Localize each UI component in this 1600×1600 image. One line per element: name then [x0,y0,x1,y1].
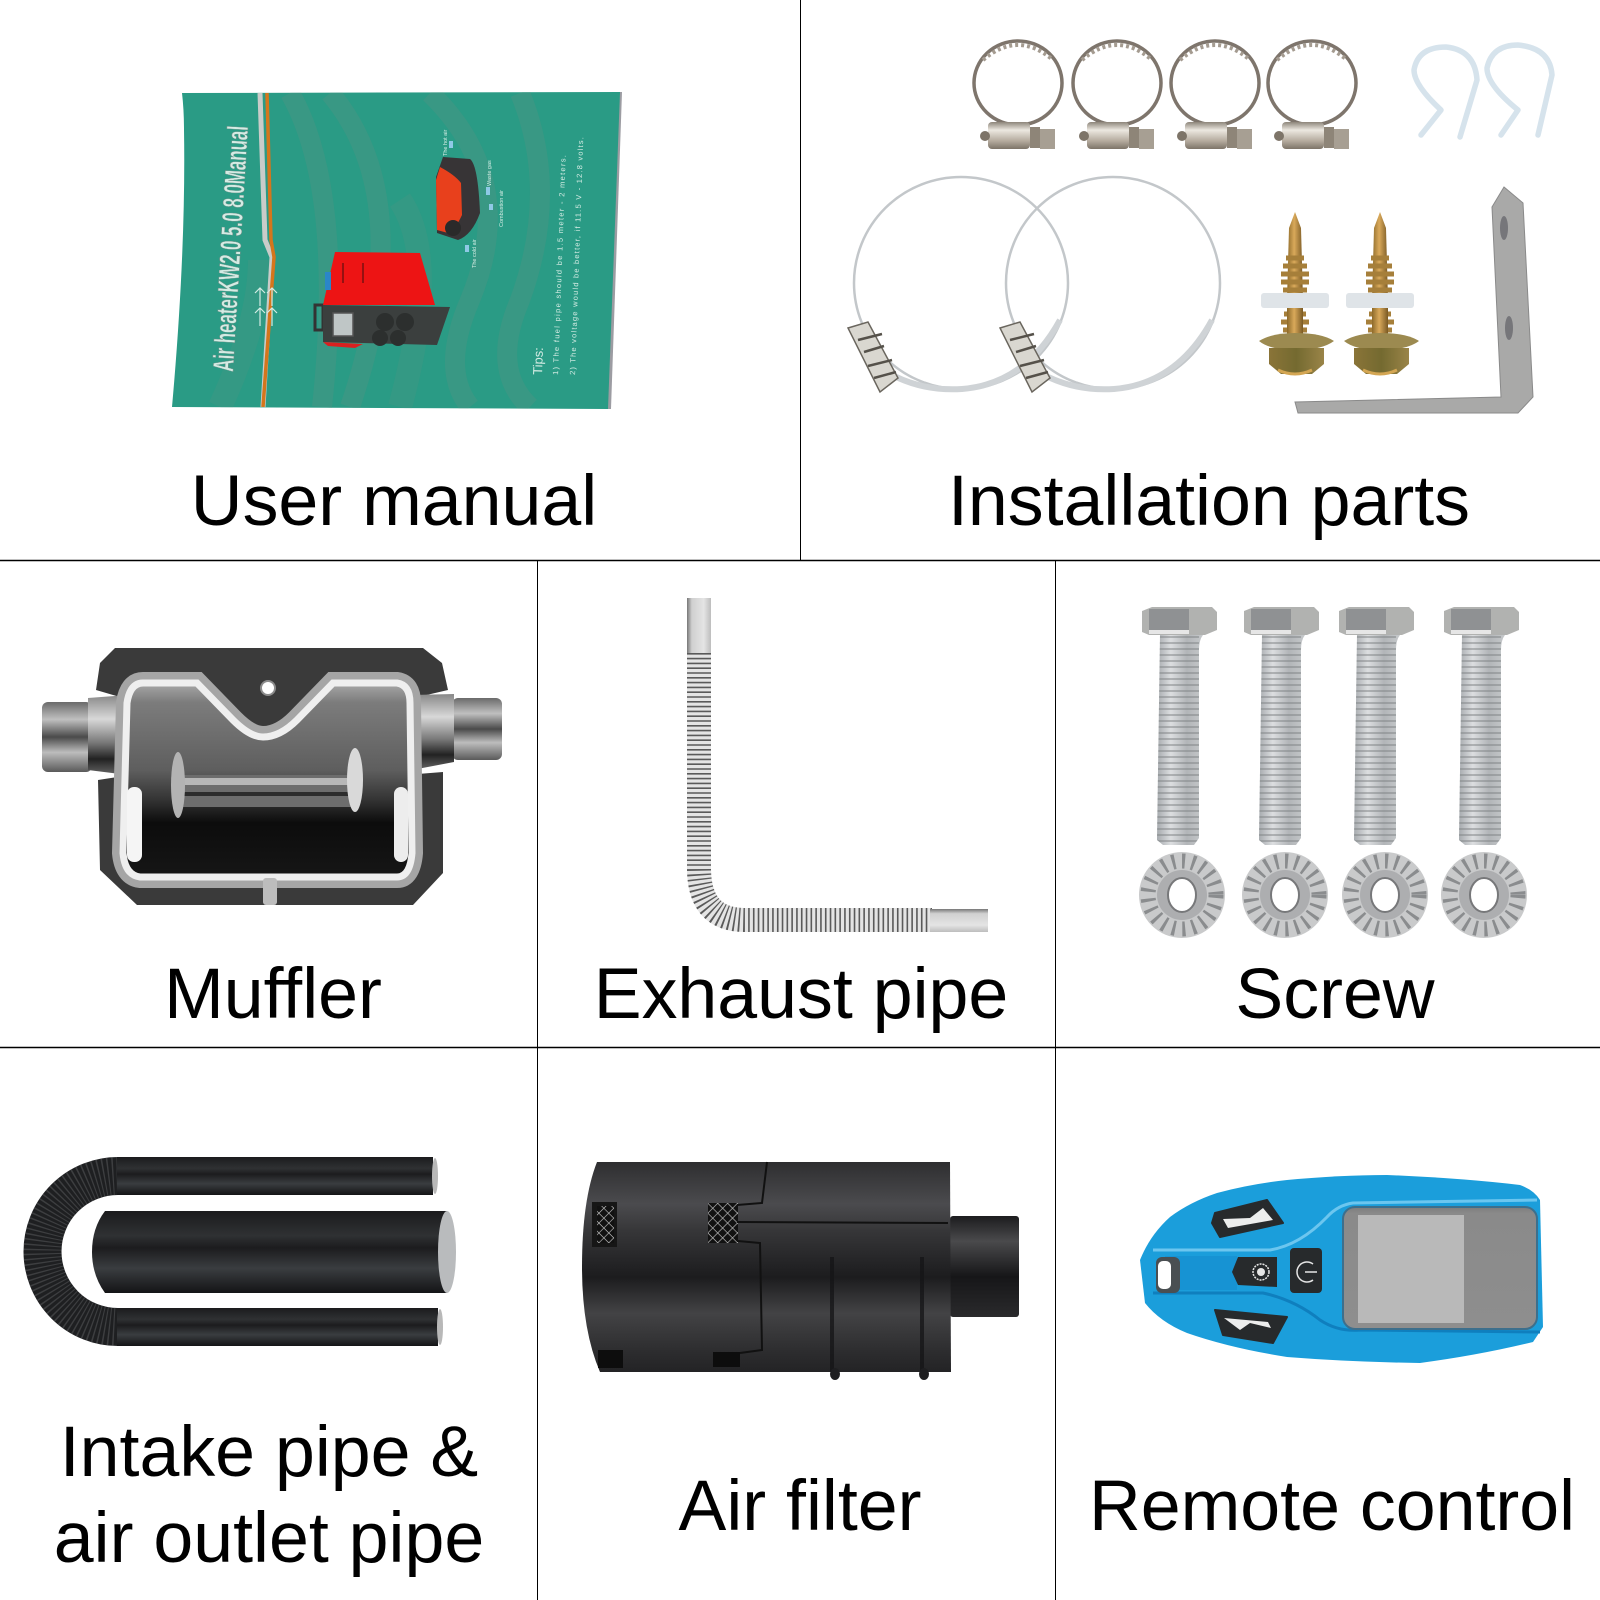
icon: small hose clamps [974,41,1356,149]
label: installation parts: Installation parts [948,461,1470,541]
icon: exhaust pipe [687,598,988,932]
panel: user manual [172,92,622,541]
icon: flange nuts [1139,852,1527,938]
label: screw: Screw [1235,954,1435,1034]
icon: air filter [582,1162,1019,1380]
label: muffler: Muffler [164,954,382,1034]
manual small labels: The hot air [443,130,449,156]
label: remote control: Remote control [1089,1466,1575,1546]
icon: P clips [1414,45,1552,137]
panel: installation parts [848,41,1552,541]
panel: air filter [582,1162,1019,1546]
icon: manual booklet: Tips: [530,347,546,375]
label: intake pipe and outlet pipe: air outlet pipe [54,1498,484,1578]
panel: exhaust pipe [594,598,1008,1034]
label: exhaust pipe: Exhaust pipe [594,954,1008,1034]
remote lanyard hole [1156,1257,1180,1293]
icon: manual booklet: Waste gas [487,160,493,186]
icon: tek screws [1259,212,1419,374]
panel: remote control [1089,1175,1575,1546]
icon: manual booklet: The cold air [472,239,478,268]
icon: bolts [1142,607,1519,845]
icon: manual booklet: 2) The voltage would be better, if 11.5 V - 12.8 volts. [568,137,585,375]
icon: large hose clamps [848,177,1220,392]
manual arrows [255,288,277,326]
small heater picture [436,141,491,252]
label: user manual: User manual [191,461,597,541]
panel: screws [1139,607,1527,1034]
heater box picture [315,252,450,348]
remote screen [1343,1207,1537,1329]
icon: manual booklet: Combustion air [499,190,505,227]
icon: muffler [42,648,502,905]
label: air filter: Air filter [679,1466,921,1546]
icon: L bracket [1295,187,1533,413]
icon: manual booklet [172,92,622,409]
icon: remote control [1140,1175,1543,1363]
remote buttons [1212,1200,1322,1343]
icon: manual booklet: 1) The fuel pipe should be 1.5 meter - 2 meters. [551,155,568,375]
filter mesh grilles [592,1202,740,1368]
icon: outlet pipe [92,1211,456,1293]
panel: muffler [42,648,502,1034]
panel: intake and outlet pipes [42,1157,484,1578]
icon: u-shaped intake pipe [42,1157,443,1346]
label: intake pipe and outlet pipe: Intake pipe & [60,1412,478,1492]
